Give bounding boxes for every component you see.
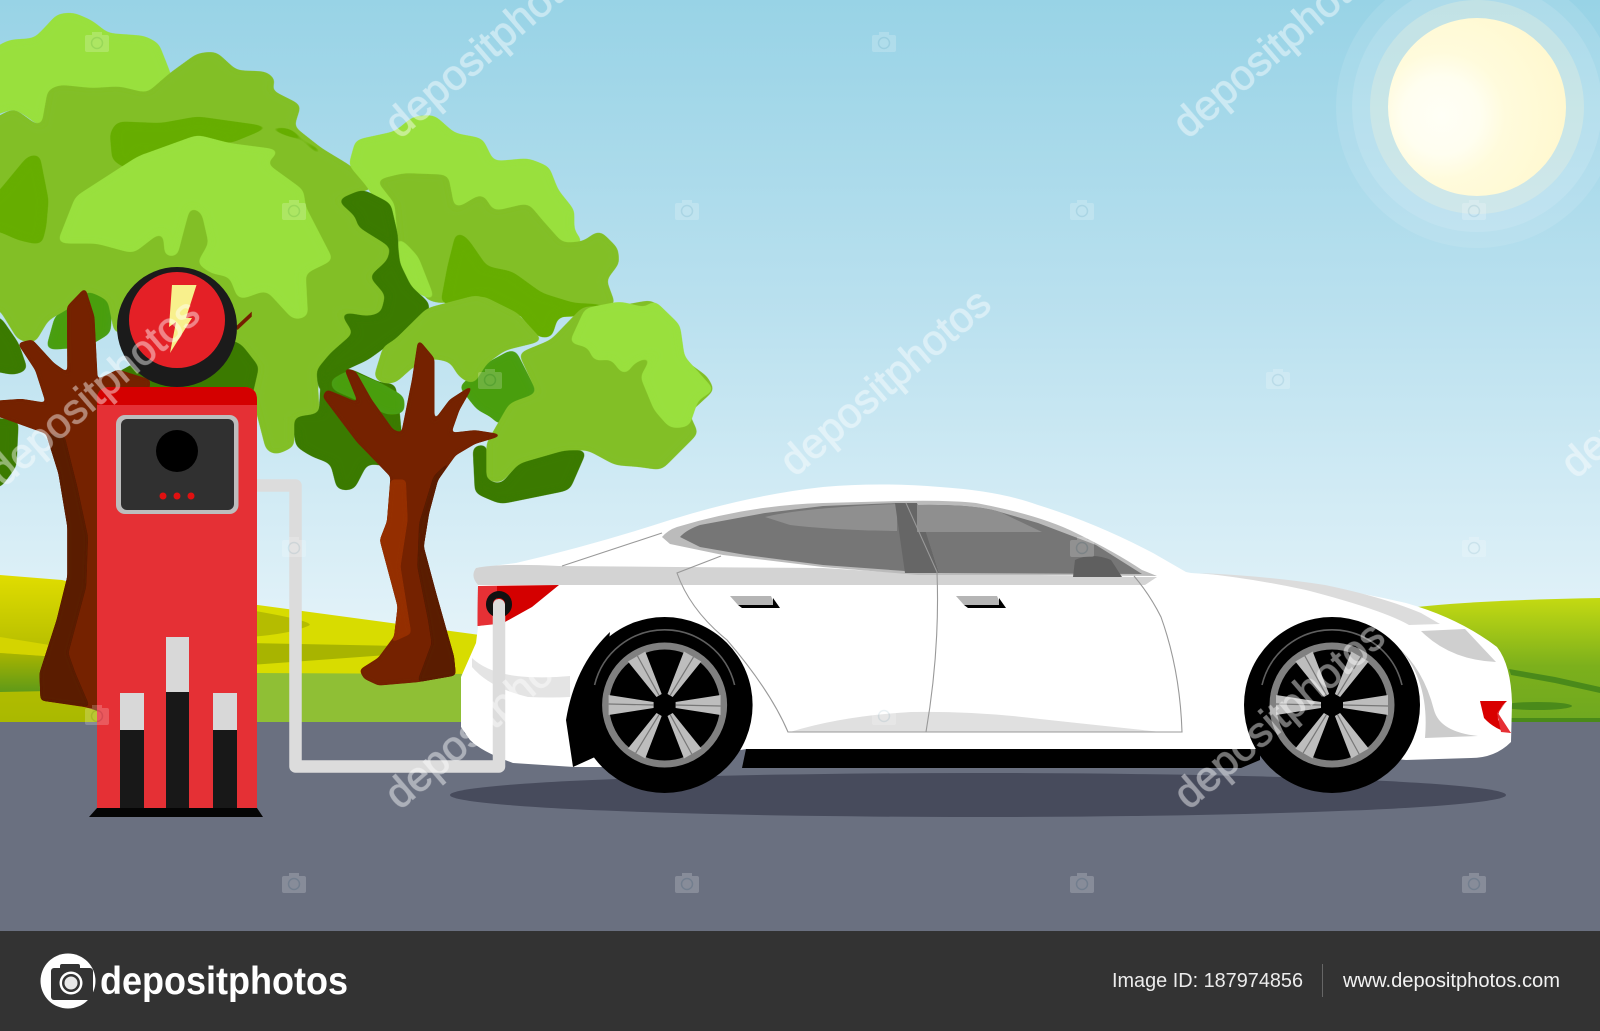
trunk: right tree — [323, 340, 503, 685]
green and yellow hills — [0, 575, 1600, 730]
foliage: right tree crown top — [349, 115, 583, 300]
watermark text — [0, 0, 1600, 818]
foliage: light sliver — [396, 233, 436, 303]
rear wheel — [577, 617, 753, 793]
foliage: left tree dark patches — [0, 117, 324, 245]
foliage: right tree lower lobe — [374, 295, 553, 385]
watermark text: depositphotos — [770, 279, 999, 485]
charging cable — [257, 486, 499, 766]
foliage: right tree side lobe — [487, 300, 714, 483]
front wheel arch trim — [1377, 633, 1478, 738]
foliage: left tree centre light — [57, 135, 333, 320]
trunk: left tree — [0, 288, 252, 713]
icon: lightning bolt — [169, 285, 196, 353]
foliage: left tree crown middle — [0, 52, 390, 455]
front red light — [1480, 701, 1511, 733]
hood stripe — [1199, 573, 1440, 625]
charge port — [486, 591, 512, 616]
front window — [917, 505, 1142, 574]
sky background — [0, 0, 1600, 640]
watermark camera icons — [85, 32, 1486, 893]
door pillar — [895, 503, 939, 573]
pump head circle — [117, 267, 237, 387]
door handles — [730, 596, 1006, 608]
pump gauge bars — [120, 637, 237, 808]
pump screen panel — [116, 415, 238, 514]
logo wordmark: depositphotos — [100, 960, 348, 1003]
foliage: left tree crown top — [0, 13, 172, 128]
sun with halo rings — [1336, 0, 1600, 248]
road — [0, 722, 1600, 931]
rear wheel arch — [566, 632, 610, 767]
door seams — [562, 503, 1182, 732]
window surround — [662, 501, 1157, 576]
image id: Image ID: 187974856 — [1112, 970, 1303, 992]
foliage: dark stripe between trees — [317, 189, 429, 400]
tree trunks — [0, 288, 503, 713]
pump body — [97, 387, 257, 817]
pump cap — [97, 387, 257, 405]
taillight — [478, 585, 559, 626]
footer logo — [40, 954, 348, 1008]
pump base — [89, 808, 263, 817]
car shadow — [450, 773, 1506, 817]
logo camera icon — [40, 954, 96, 1008]
rear window — [680, 503, 905, 571]
website url: www.depositphotos.com — [1342, 970, 1560, 992]
trees foliage — [0, 13, 714, 504]
foliage: right tree dark patch — [441, 230, 615, 338]
foliage: back dark leaves — [0, 288, 587, 504]
watermark text: depositphotos — [1164, 612, 1393, 818]
charging pump — [89, 267, 263, 817]
front wheel — [1244, 617, 1420, 793]
car sill — [742, 749, 1260, 768]
footer bar — [0, 931, 1600, 1031]
headlight — [1421, 629, 1496, 662]
car body — [461, 484, 1512, 767]
side mirror — [1073, 556, 1122, 577]
car beltline — [473, 565, 1157, 585]
rear swoop — [472, 658, 570, 698]
foliage: right tree crown middle — [377, 173, 619, 317]
foliage: right tree side light — [569, 298, 714, 428]
door bottom shading — [790, 712, 1161, 732]
watermark text: depositphotos — [375, 612, 604, 818]
electric car — [461, 484, 1512, 793]
